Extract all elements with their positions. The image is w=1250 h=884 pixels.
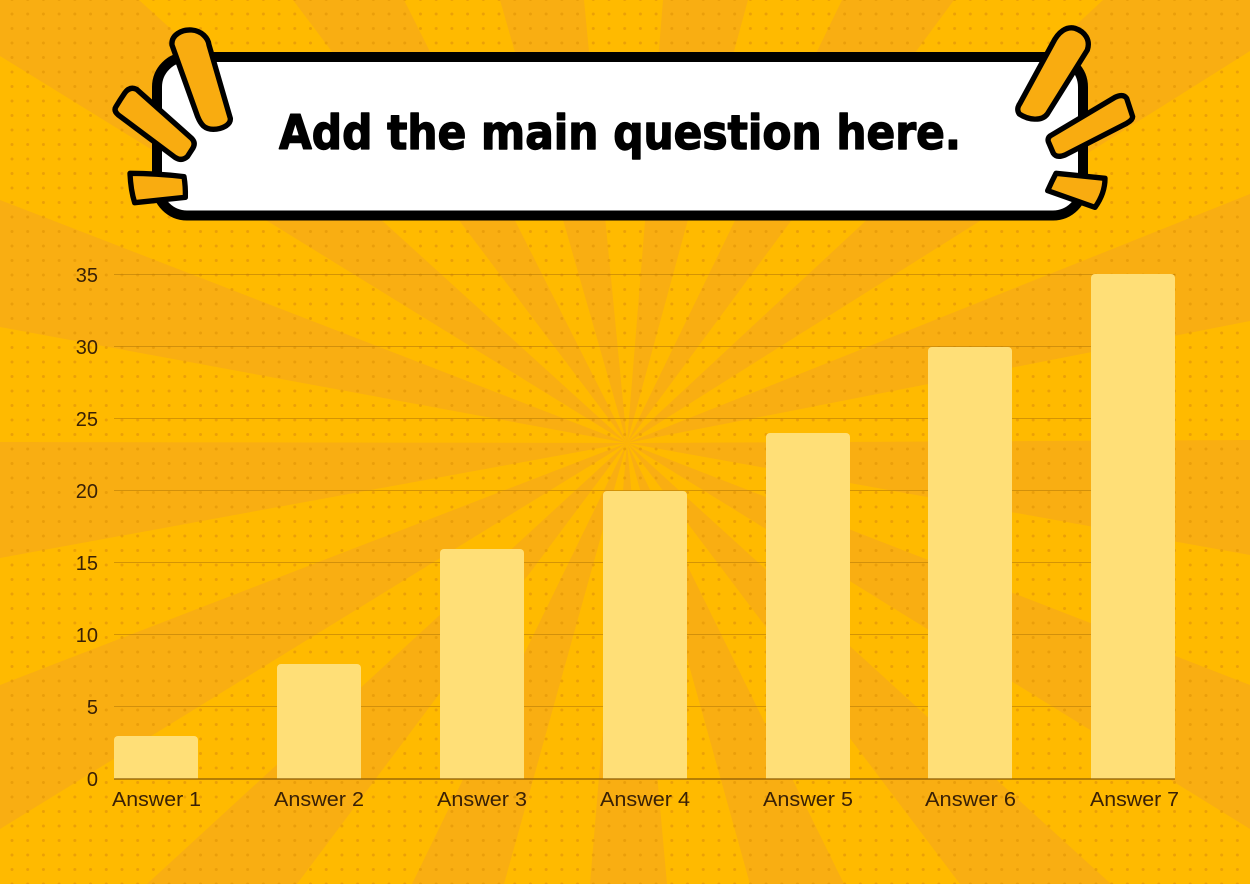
y-axis labels: 5 [87, 697, 98, 719]
y-axis labels: 15 [76, 553, 98, 575]
bars [114, 274, 1175, 779]
bar chart [76, 265, 1179, 811]
title: Add the main question here. [279, 106, 961, 161]
banner box [157, 57, 1083, 216]
x-axis labels: Answer 6 [925, 789, 1016, 811]
x-axis labels: Answer 2 [274, 789, 364, 811]
y-axis labels [76, 265, 98, 791]
x-axis labels: Answer 7 [1090, 789, 1179, 811]
y-axis labels: 25 [76, 409, 98, 431]
x-axis labels: Answer 3 [437, 789, 527, 811]
y-axis labels: 35 [76, 265, 98, 287]
y-axis labels: 20 [76, 481, 98, 503]
x-axis labels: Answer 5 [763, 789, 853, 811]
y-axis labels: 30 [76, 337, 98, 359]
x-axis labels: Answer 4 [600, 789, 690, 811]
y-axis labels: 0 [87, 769, 98, 791]
y-axis labels: 10 [76, 625, 98, 647]
x-axis labels: Answer 1 [112, 789, 201, 811]
x-axis labels [112, 789, 1179, 811]
decoration: left burst strokes [115, 30, 230, 203]
title banner [157, 57, 1083, 216]
decoration: right burst strokes [1018, 28, 1133, 207]
